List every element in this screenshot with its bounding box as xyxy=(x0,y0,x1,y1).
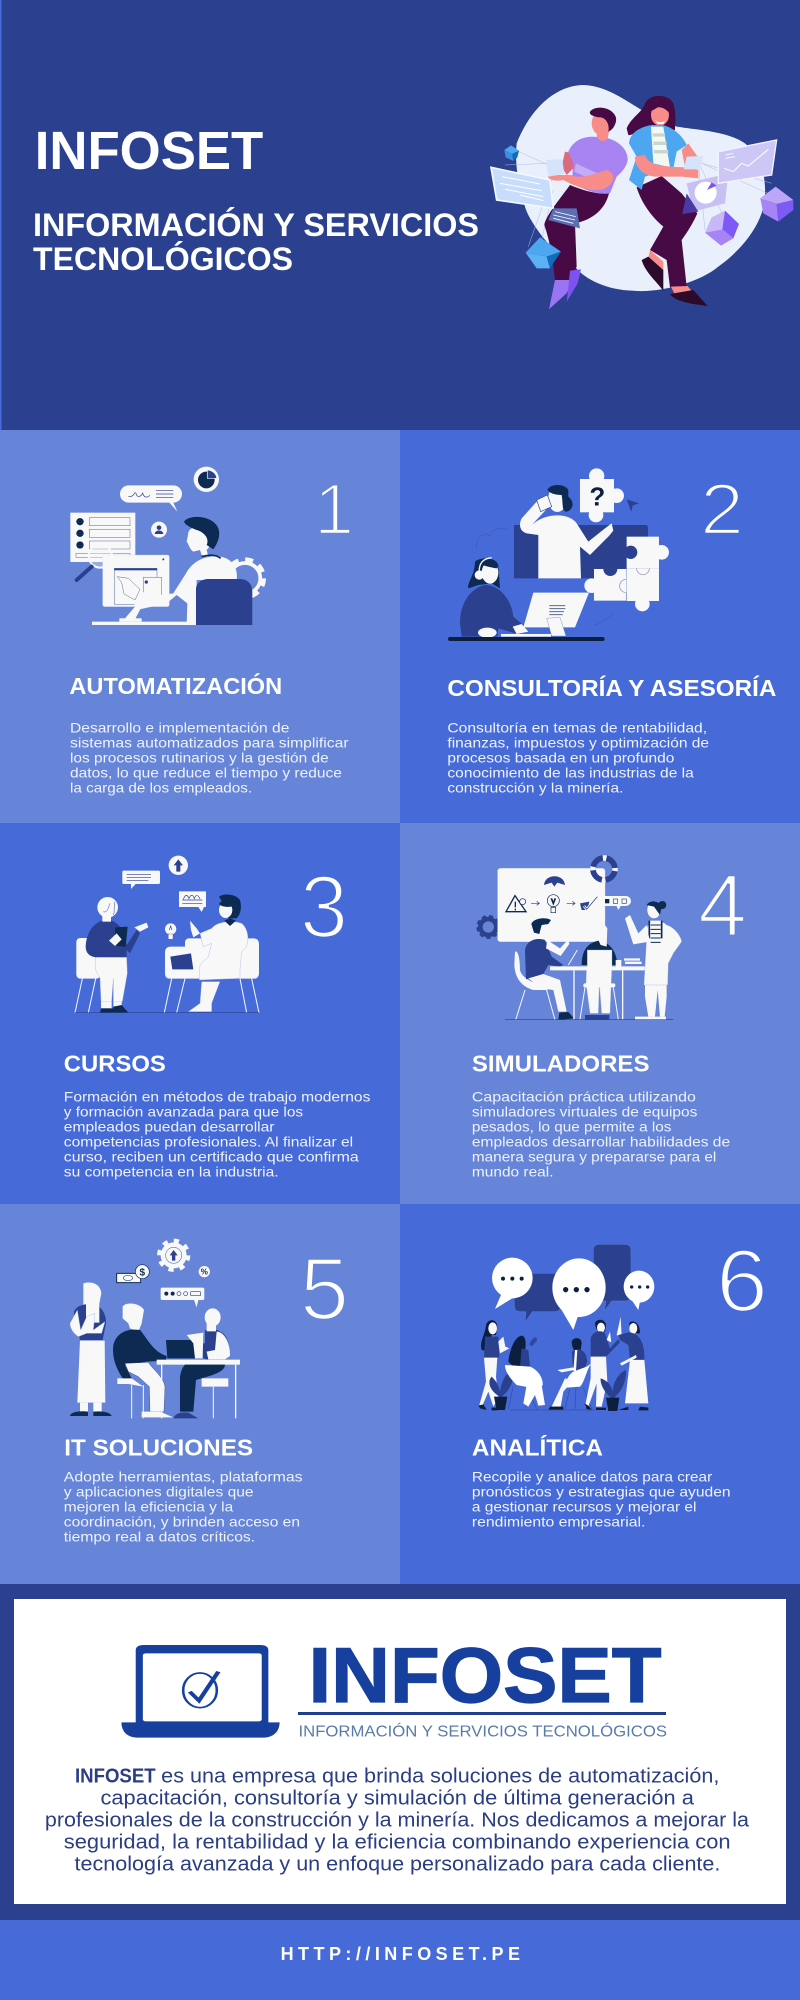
body text: competencias profesionales. Al finalizar el xyxy=(64,1134,353,1150)
icon: people with speech bubbles xyxy=(479,1244,654,1411)
description text: seguridad, la rentabilidad y la eficiencia combinando experiencia con xyxy=(64,1832,731,1854)
standing pair xyxy=(595,1320,606,1332)
body text: curso, reciben un certificado que confirma xyxy=(64,1149,359,1165)
logo wordmark: INFOSET xyxy=(308,1631,662,1719)
logo: laptop with check mark xyxy=(121,1645,280,1738)
body text: a gestionar recursos y mejorar el xyxy=(472,1499,696,1515)
body text: Formación en métodos de trabajo modernos xyxy=(64,1089,370,1105)
puzzle pieces xyxy=(584,537,669,611)
description text: capacitación, consultoría y simulación de última generación a xyxy=(100,1788,695,1810)
icon: team at a table with gear xyxy=(70,1241,240,1418)
laptop xyxy=(166,1340,195,1358)
logo tagline: INFORMACIÓN Y SERVICIOS TECNOLÓGICOS xyxy=(298,1724,667,1741)
body text: mundo real. xyxy=(472,1164,554,1180)
heading: SIMULADORES xyxy=(472,1050,650,1076)
table xyxy=(550,966,648,970)
panel: cursos xyxy=(0,823,400,1204)
body text: conocimiento de las industrias de la xyxy=(447,765,694,781)
number 2: 2 xyxy=(700,470,744,550)
plant right xyxy=(601,1370,626,1398)
body text: manera segura y prepararse para el xyxy=(472,1149,716,1165)
woman xyxy=(627,96,675,135)
description text: es una empresa que brinda soluciones de automatización, xyxy=(161,1766,719,1788)
icon: training around a whiteboard xyxy=(478,858,682,1020)
body text: procesos basada en un profundo xyxy=(447,750,675,766)
body text xyxy=(64,1469,303,1545)
number 4: 4 xyxy=(698,856,747,955)
body text: construcción y la minería. xyxy=(447,780,623,796)
icon: team at a table with gear: % xyxy=(201,1268,208,1277)
number 3: 3 xyxy=(300,857,348,956)
body text: pronósticos y estrategias que ayuden xyxy=(472,1484,731,1500)
seated bearded man xyxy=(572,1338,582,1352)
body text: sistemas automatizados para simplificar xyxy=(70,735,349,751)
body text: empleados puedan desarrollar xyxy=(64,1119,275,1135)
body text xyxy=(447,720,709,796)
logo rule xyxy=(298,1712,666,1715)
seated woman xyxy=(582,941,617,965)
call agent xyxy=(460,585,523,637)
heading: CONSULTORÍA Y ASESORÍA xyxy=(447,674,776,701)
body text: mejoren la eficiencia y la xyxy=(64,1499,233,1515)
description text xyxy=(45,1766,750,1876)
heading: AUTOMATIZACIÓN xyxy=(69,672,282,699)
purple cubes xyxy=(760,187,793,204)
illustration: two people with floating data panels and cubes xyxy=(491,85,793,309)
seated person right xyxy=(195,1330,230,1359)
woman feet xyxy=(648,250,663,270)
seated woman xyxy=(508,1336,528,1367)
body text xyxy=(64,1089,370,1180)
right person xyxy=(199,922,248,980)
panel: header xyxy=(0,0,800,430)
description text: tecnología avanzada y un enfoque personalizado para cada cliente. xyxy=(74,1854,720,1876)
body text: simuladores virtuales de equipos xyxy=(472,1104,697,1120)
body text: coordinación, y brinden acceso en xyxy=(64,1514,300,1530)
footer band xyxy=(0,1920,800,2000)
panel: simuladores xyxy=(400,823,800,1204)
right sofa xyxy=(165,938,259,979)
website url: HTTP://INFOSET.PE xyxy=(281,1944,520,1964)
body text: y formación avanzada para que los xyxy=(64,1104,303,1120)
blue cubes xyxy=(526,237,561,257)
description text: INFOSET xyxy=(75,1766,156,1788)
heading: ANALÍTICA xyxy=(472,1434,603,1460)
seated man with chair xyxy=(514,951,548,990)
panel: company card xyxy=(0,1584,800,1920)
description text: profesionales de la construcción y la minería. Nos dedicamos a mejorar la xyxy=(45,1810,750,1832)
man torso xyxy=(562,152,575,175)
panel: it soluciones xyxy=(0,1204,400,1584)
body text: datos, lo que reduce el tiempo y reduce xyxy=(70,765,342,781)
number 1: 1 xyxy=(314,470,354,550)
body text xyxy=(472,1469,731,1530)
standing woman xyxy=(645,983,667,1017)
body text: Consultoría en temas de rentabilidad, xyxy=(447,720,707,736)
title: INFOSET xyxy=(35,121,263,181)
left chair xyxy=(76,938,100,979)
man head xyxy=(597,127,610,141)
plant left xyxy=(489,1370,514,1397)
icon: team at a table with gear: $ xyxy=(140,1267,146,1278)
panel: analítica xyxy=(400,1204,800,1584)
body text: la carga de los empleados. xyxy=(70,780,252,796)
seated person dark sweater xyxy=(123,1304,144,1332)
heading: CURSOS xyxy=(64,1050,166,1076)
man legs xyxy=(544,185,609,280)
icon: two people talking on chairs xyxy=(75,856,259,1013)
body text xyxy=(472,1089,730,1180)
body text: Desarrollo e implementación de xyxy=(70,720,290,736)
subtitle xyxy=(33,207,479,277)
body text: y aplicaciones digitales que xyxy=(64,1484,254,1500)
body text xyxy=(70,720,349,796)
heading: IT SOLUCIONES xyxy=(64,1434,253,1460)
icon: person at computer with form and gear xyxy=(70,467,264,625)
body text: Adopte herramientas, plataformas xyxy=(64,1469,303,1485)
monitor and desk xyxy=(523,593,589,627)
puzzle piece with question mark: ? xyxy=(589,482,605,512)
left person xyxy=(86,920,140,957)
standing woman left xyxy=(481,1320,497,1352)
left data panel xyxy=(491,167,553,208)
body text: tiempo real a datos críticos. xyxy=(64,1529,255,1545)
body text: pesados, lo que permite a los xyxy=(472,1119,671,1135)
number 5: 5 xyxy=(300,1239,349,1338)
table xyxy=(157,1360,240,1365)
number 6: 6 xyxy=(716,1231,768,1330)
subtitle: TECNOLÓGICOS xyxy=(33,241,293,277)
subtitle: INFORMACIÓN Y SERVICIOS xyxy=(33,207,479,243)
body text: Recopile y analice datos para crear xyxy=(472,1469,713,1485)
icon: consultants and puzzle pieces xyxy=(448,468,669,641)
body text: empleados desarrollar habilidades de xyxy=(472,1134,730,1150)
body text: finanzas, impuestos y optimización de xyxy=(447,735,709,751)
body text: los procesos rutinarios y la gestión de xyxy=(70,750,329,766)
puzzle piece with question mark xyxy=(580,468,624,522)
body text: su competencia en la industria. xyxy=(64,1164,279,1180)
body text: rendimiento empresarial. xyxy=(472,1514,645,1530)
chart panels xyxy=(687,173,728,212)
panel: consultoría y asesoría xyxy=(400,430,800,823)
body text: Capacitación práctica utilizando xyxy=(472,1089,696,1105)
standing woman xyxy=(83,1283,101,1305)
panel: automatización xyxy=(0,430,400,823)
